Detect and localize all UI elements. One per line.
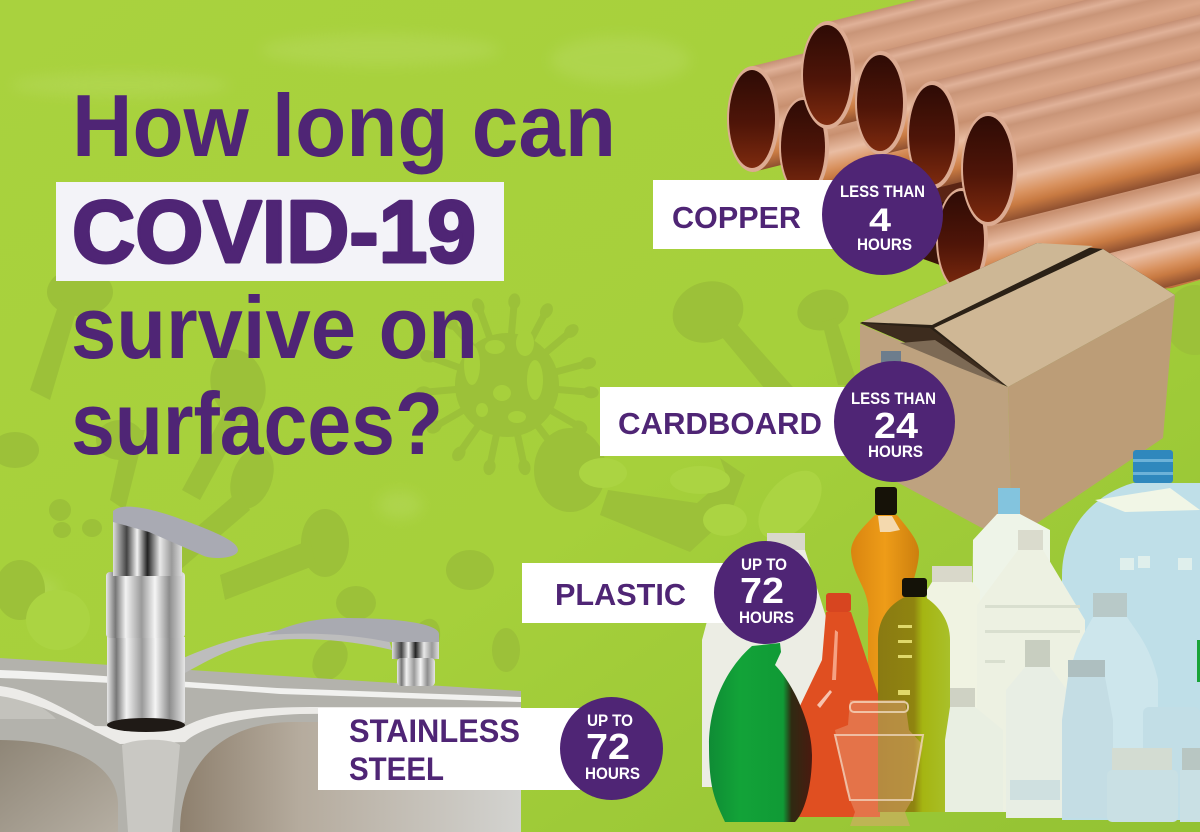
yellow-green bottle: [878, 578, 950, 812]
label: copper: COPPER: [672, 200, 801, 235]
title: surfaces?: surfaces?: [71, 374, 443, 473]
badge: less than 4 hours: 4: [869, 202, 891, 238]
label: cardboard: CARDBOARD: [618, 406, 822, 441]
copper pipe 9: [990, 160, 1200, 325]
box underlay: [860, 243, 1175, 387]
faucet middle body: [106, 572, 185, 638]
orange bottle: [851, 487, 919, 720]
rear box flap: [862, 243, 1093, 325]
white bottle at back: [927, 566, 980, 810]
badge: less than 24 hours: LESS THAN: [851, 389, 936, 408]
central coronavirus motif: [415, 293, 599, 476]
faucet: [106, 507, 439, 732]
drainer rim: [0, 686, 521, 744]
faucet upper body: [113, 522, 182, 576]
cardboard box image: [860, 243, 1175, 540]
copper pipe 4: [907, 1, 1200, 189]
large white bottle behind badge: [702, 533, 827, 787]
faucet base ring: [107, 718, 185, 732]
badge: up to 72 hours: 72: [740, 570, 784, 611]
big blue water bottle: [1062, 450, 1200, 820]
copper pipe 3: [855, 0, 1200, 155]
badge: up to 72 hours: [560, 697, 663, 800]
copper pipe 2: [801, 0, 1200, 129]
box printed mark: [881, 351, 901, 367]
copper pipe 6: [779, 60, 954, 197]
front box flap: [934, 249, 1175, 387]
right basin: [180, 722, 521, 832]
rim highlight: [0, 670, 521, 702]
faucet spout: [155, 618, 439, 686]
faucet lower body: [107, 637, 185, 730]
drainer panel: [0, 692, 56, 719]
badge: less than 24 hours: [834, 361, 955, 482]
copper pipes image: [727, 0, 1200, 325]
copper pipe 8: [936, 115, 1200, 292]
badge: less than 24 hours: HOURS: [868, 442, 923, 461]
badge: less than 24 hours: 24: [874, 405, 918, 446]
clear jar right: [1107, 748, 1178, 822]
dark interior of open flap: [860, 323, 1005, 385]
bridge between basins: [122, 740, 180, 832]
badge: less than 4 hours: HOURS: [857, 235, 912, 254]
badge: less than 4 hours: LESS THAN: [840, 182, 925, 201]
copper pipe 7: [829, 80, 1031, 225]
badge: less than 4 hours: [822, 154, 943, 275]
label: stainless steel: [318, 697, 663, 800]
label: stainless steel: STEEL: [349, 751, 444, 787]
lower copper pipe body: [1030, 170, 1200, 300]
label: stainless steel: STAINLESS: [349, 713, 520, 749]
clear jar in front: [835, 700, 923, 826]
label: plastic: [522, 541, 817, 644]
label: plastic: PLASTIC: [555, 577, 686, 612]
title: How long can: How long can: [72, 76, 616, 175]
badge: up to 72 hours: [714, 541, 817, 644]
small clear bottle: [1006, 640, 1067, 818]
sink surface: [0, 658, 521, 832]
badge: up to 72 hours: 72: [586, 726, 630, 767]
background virus motifs: [0, 268, 1200, 687]
title highlight: COVID-19: COVID-19: [72, 182, 476, 281]
plastic bottles image: [702, 450, 1200, 826]
clear bottle with blue cap: [972, 488, 1050, 660]
small jar at far right: [1180, 748, 1200, 822]
badge: up to 72 hours: UP TO: [741, 555, 787, 574]
faucet handle: [113, 507, 238, 558]
title: survive on: survive on: [71, 278, 478, 377]
background texture speckles: [0, 34, 690, 604]
rear right jar: [1143, 707, 1200, 807]
badge: up to 72 hours: UP TO: [587, 711, 633, 730]
label: cardboard: [600, 361, 955, 482]
lighter background motifs: [26, 458, 834, 650]
badge: up to 72 hours: HOURS: [585, 764, 640, 783]
green sliver at right edge: [1197, 640, 1200, 682]
box left face: [860, 324, 1012, 540]
green spray bottle: [709, 643, 812, 822]
clear bottle mid: [945, 688, 1003, 812]
dark gaps between pipes: [780, 70, 1200, 275]
badge: up to 72 hours: HOURS: [739, 608, 794, 627]
tall clear bottle: [977, 530, 1085, 812]
blue tinted bottle: [1068, 593, 1158, 812]
stainless steel sink image: [0, 507, 521, 832]
copper pipe 1: [727, 29, 903, 172]
label: copper: [653, 154, 943, 275]
copper pipe 5: [961, 47, 1200, 226]
small blue bottle: [1062, 660, 1113, 818]
box right face: [1008, 295, 1175, 540]
red bottle: [798, 593, 880, 817]
left basin: [0, 740, 118, 832]
